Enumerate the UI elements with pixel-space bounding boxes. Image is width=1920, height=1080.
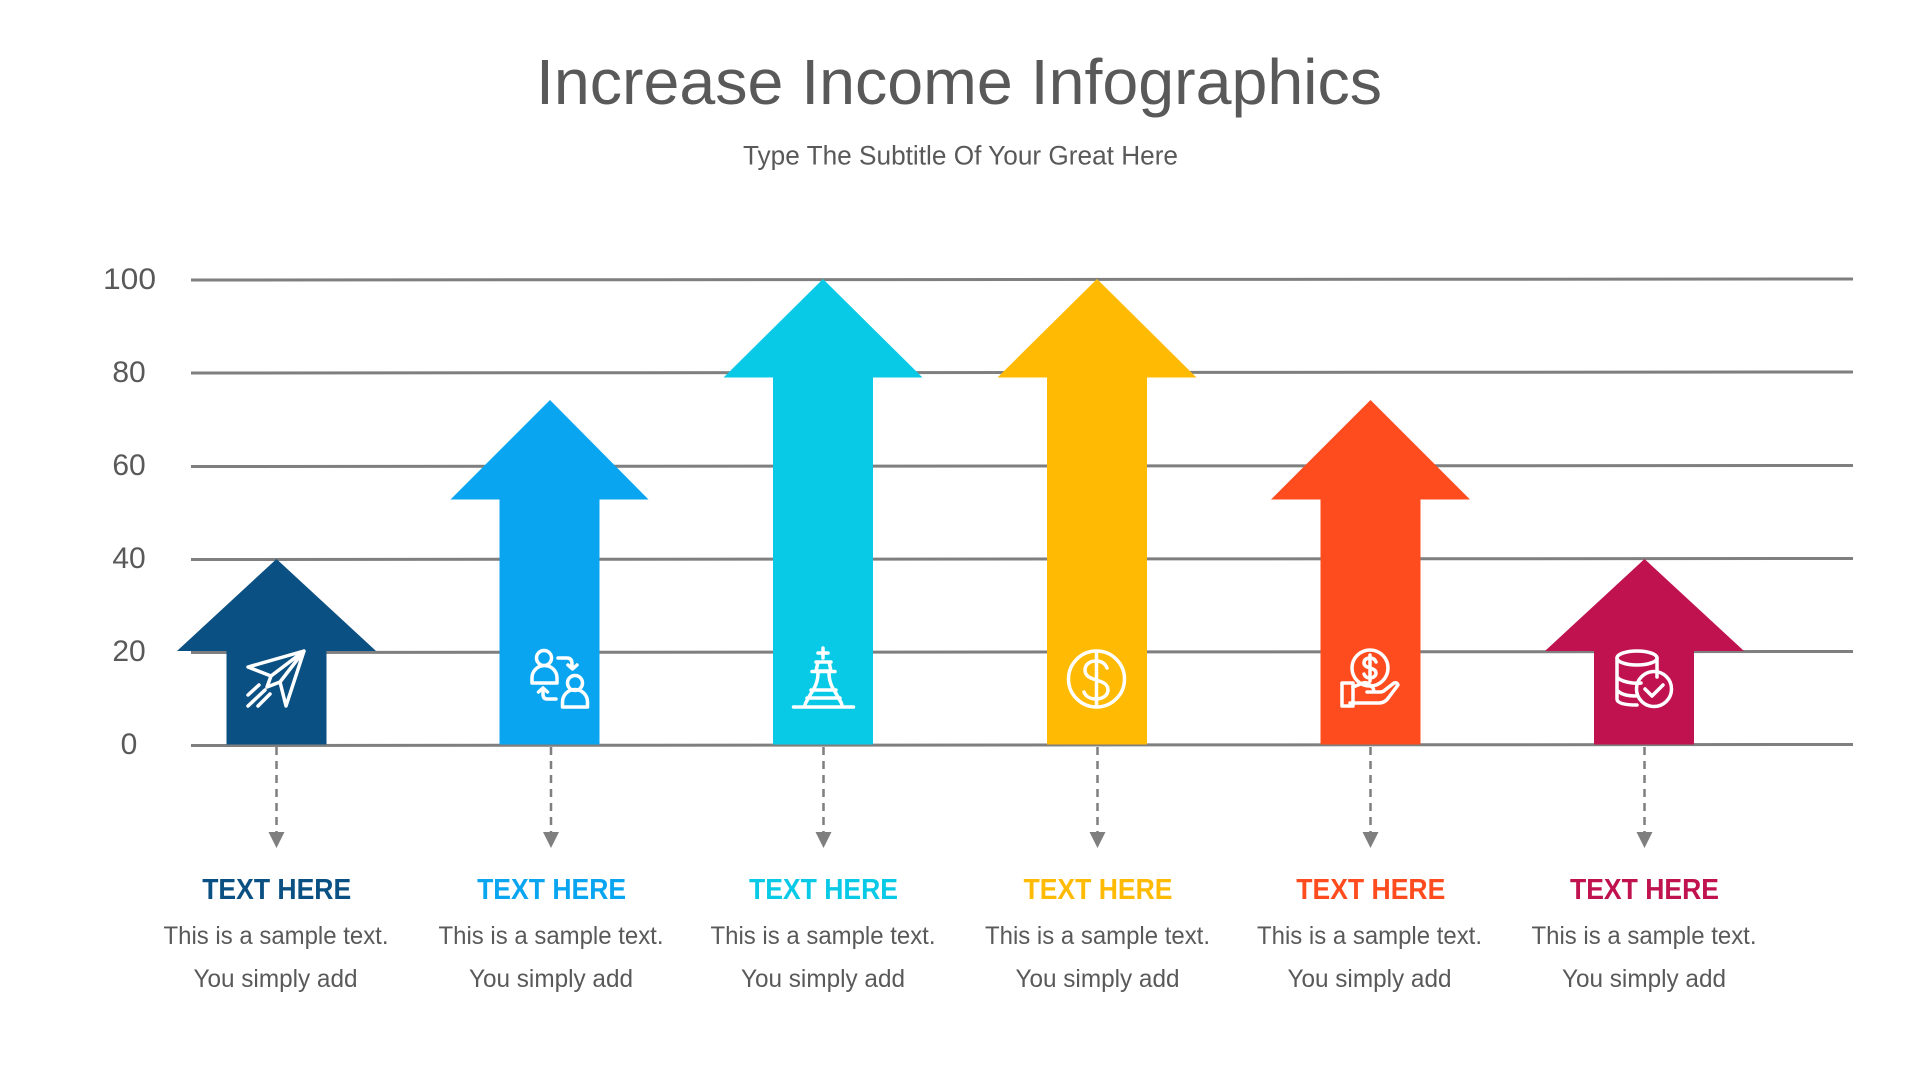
label 2: This is a sample text. [438,922,664,950]
label 3 [710,874,936,993]
dashed arrow 3 [816,747,832,848]
icon: dollar coin [1068,651,1124,707]
y axis labels [103,263,156,761]
label 1 [164,874,388,993]
label 1: This is a sample text. [164,922,388,950]
label 3: TEXT HERE [749,874,898,906]
y axis labels: 20 [112,635,146,668]
chart gridlines [191,279,1853,746]
dashed arrow 5 [1362,747,1378,848]
label 5: You simply add [1288,965,1452,993]
y axis labels: 80 [112,356,146,389]
icon: chess piece [794,648,854,707]
label 6: You simply add [1562,965,1726,993]
icon: people exchange [532,650,588,707]
dashed arrow 6 [1636,747,1652,848]
label 5 [1257,874,1482,993]
label 6: TEXT HERE [1570,874,1719,906]
y axis labels: 0 [121,728,137,761]
label 1: TEXT HERE [202,874,351,906]
label 6 [1532,874,1756,993]
label 5: This is a sample text. [1257,922,1482,950]
arrow 5: orange [1271,400,1470,744]
icon: hand holding coin [1342,650,1398,706]
subtitle: Type The Subtitle Of Your Great Here [743,140,1178,170]
label 5: TEXT HERE [1296,874,1445,906]
label 2: TEXT HERE [477,874,626,906]
label 4: This is a sample text. [985,922,1210,950]
dashed arrow 1 [268,747,284,848]
label 4 [985,874,1210,993]
dashed arrow 2 [543,747,559,848]
icon: database check [1617,651,1672,706]
label 4: You simply add [1016,965,1180,993]
arrow 1: navy [177,559,376,744]
label 4: TEXT HERE [1024,874,1172,906]
y axis labels: 60 [112,449,146,482]
dashed arrow 4 [1090,747,1106,848]
arrow 3: cyan [724,279,922,744]
label 3: This is a sample text. [710,922,936,950]
arrow 2: blue [450,400,648,744]
label 3: You simply add [741,965,905,993]
y axis labels: 40 [112,542,146,575]
arrow 6: crimson [1545,559,1744,744]
label 2 [438,874,664,993]
label 2: You simply add [469,965,633,993]
title: Increase Income Infographics [536,46,1382,118]
icon: paper plane [248,651,304,706]
label 6: This is a sample text. [1532,922,1756,950]
arrow 4: yellow [998,279,1196,744]
y axis labels: 100 [103,263,156,296]
label 1: You simply add [194,965,358,993]
